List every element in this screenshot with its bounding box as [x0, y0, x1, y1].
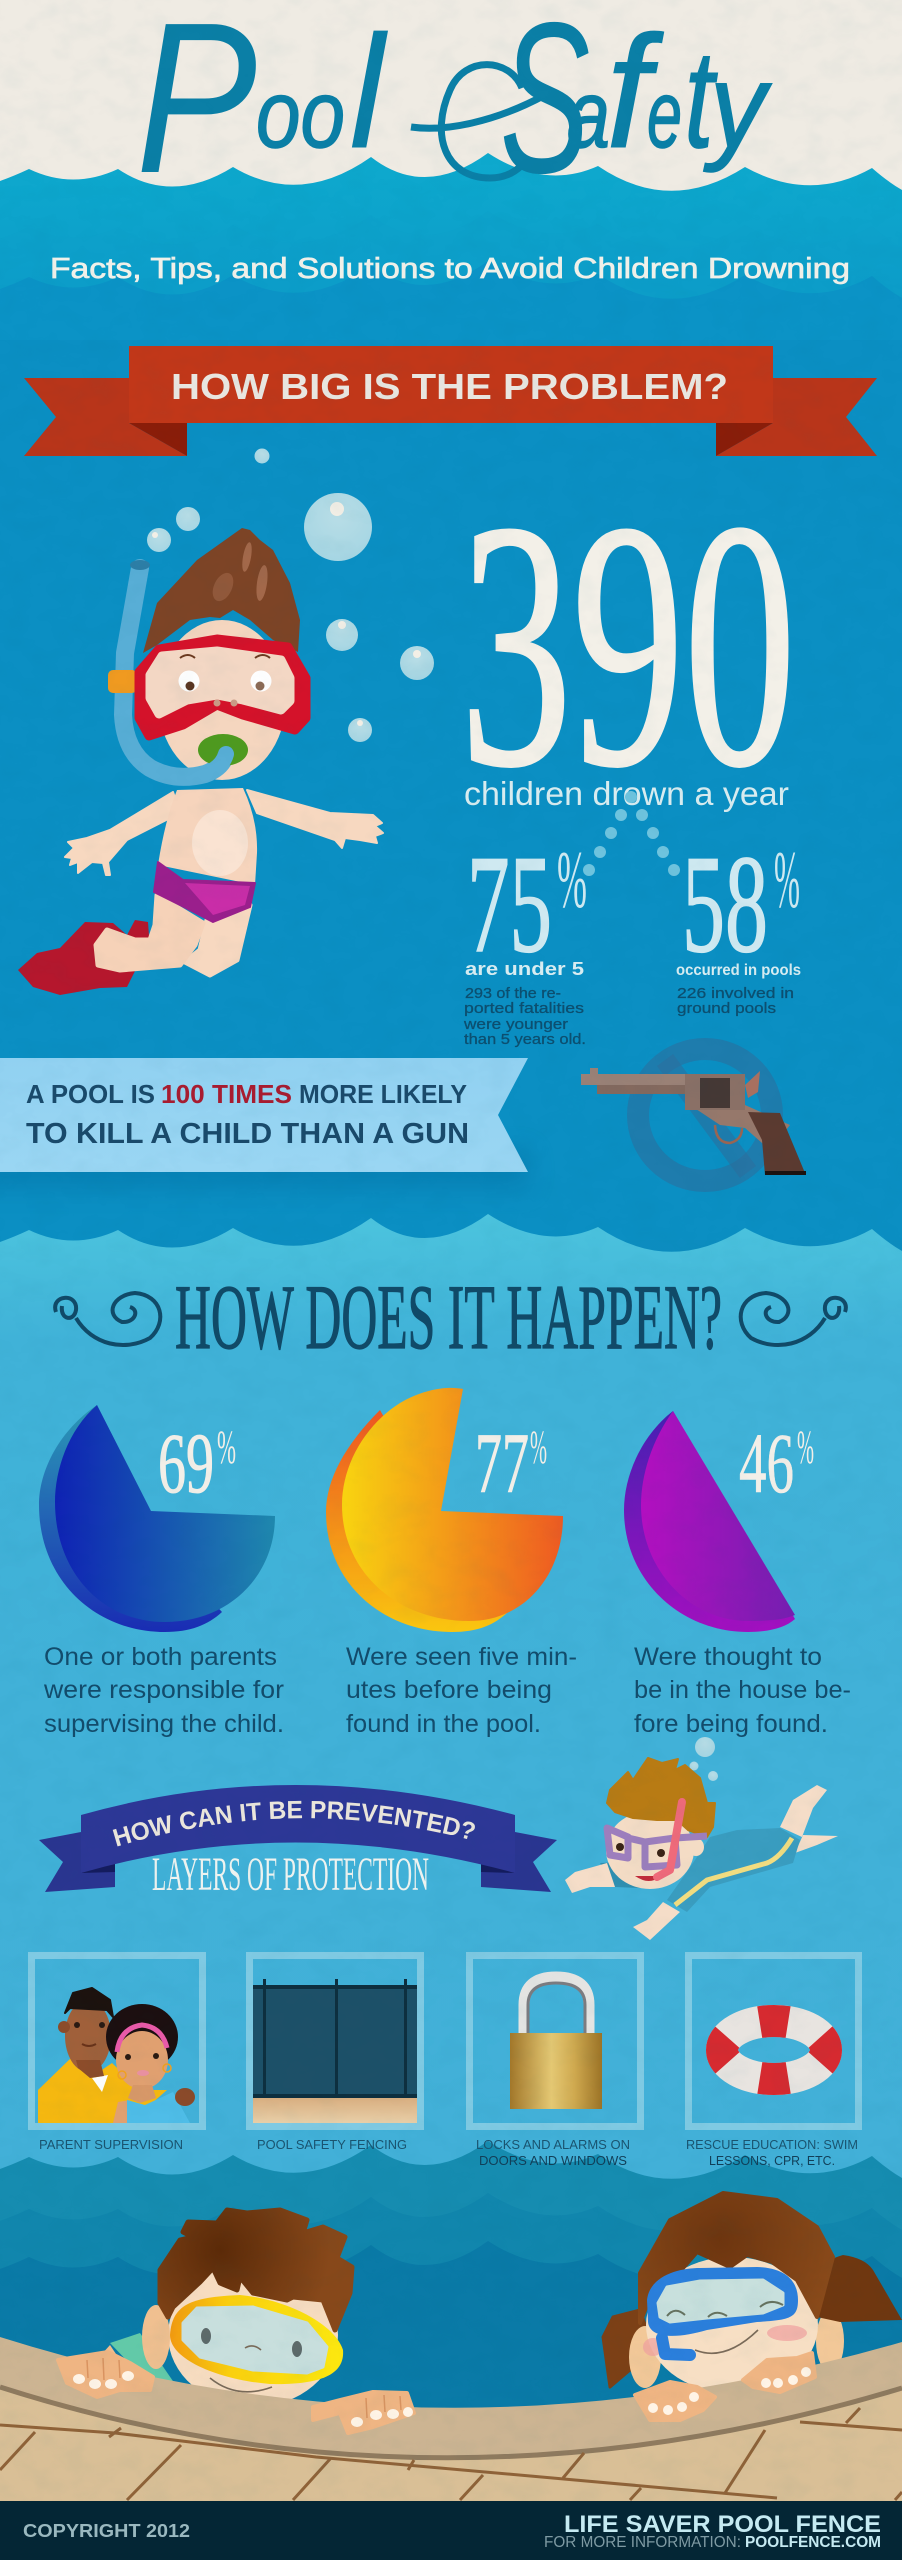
- hair: [160, 2210, 352, 2330]
- goggle lens: [658, 2280, 783, 2322]
- footer: FOR MORE INFORMATION:: [544, 2534, 741, 2551]
- smile: [695, 2330, 758, 2353]
- gun comparison banner: A POOL IS: [26, 1079, 155, 1109]
- layer: locks and alarms: [470, 1956, 640, 2168]
- small bubbles above swimmer: [690, 1737, 718, 1781]
- right pigtail: [813, 2255, 902, 2322]
- couple illustration: [38, 1988, 195, 2123]
- pie chart: 77 percent: utes before being: [346, 1676, 552, 1704]
- layer: pool safety fencing: POOL SAFETY FENCING: [257, 2137, 407, 2152]
- water section: how does it happen: [0, 1214, 902, 2261]
- red ribbon heading: HOW BIG IS THE PROBLEM?: [171, 366, 728, 407]
- face: [646, 2257, 818, 2393]
- deck tiles: [0, 2387, 902, 2501]
- woman's arm and dress: [113, 2100, 132, 2123]
- left pigtail: [603, 2310, 647, 2387]
- title: y: [703, 39, 773, 173]
- yellow stripe: [675, 1838, 792, 1905]
- pie chart: 46 percent: Were thought to: [634, 1643, 822, 1671]
- nose and smile: [210, 2346, 272, 2392]
- diving mask: [139, 639, 306, 736]
- gun comparison banner: [0, 1058, 528, 1172]
- gun comparison banner: TO KILL A CHILD THAN A GUN: [26, 1118, 469, 1150]
- stat: 75 percent: were younger: [463, 1016, 568, 1033]
- bubbles around diver: [147, 448, 434, 742]
- layer: locks and alarms: LOCKS AND ALARMS ON: [476, 2137, 630, 2152]
- front leg: [96, 895, 203, 970]
- head: [606, 1811, 694, 1889]
- boy face: [158, 620, 286, 780]
- stat: 75 percent: than 5 years old.: [464, 1031, 586, 1048]
- eyes and nose: [178, 655, 272, 706]
- back leg: [185, 905, 250, 975]
- pie chart: 69 percent: %: [217, 1421, 236, 1474]
- pie chart: 77 percent: found in the pool.: [346, 1710, 541, 1738]
- eyes: [616, 1843, 665, 1857]
- swimsuit: [667, 1828, 800, 1912]
- stat: 75 percent: [463, 827, 587, 1048]
- layer: rescue education: RESCUE EDUCATION: SWIM: [686, 2137, 858, 2152]
- green swimsuit: [110, 2333, 177, 2387]
- stat: 75 percent: 75: [467, 827, 552, 982]
- mouthpiece: [198, 734, 248, 766]
- gun comparison banner: 100 TIMES: [161, 1079, 292, 1109]
- infographic canvas: %: [774, 834, 800, 925]
- pie chart: 46 percent: [624, 1411, 851, 1738]
- title: e: [647, 61, 682, 168]
- layer: parent supervision: [32, 1956, 202, 2152]
- hair: [640, 2193, 833, 2323]
- blue prevention ribbon: HOW CAN IT BE PREVENTED?: [112, 1800, 475, 1846]
- red fins: [18, 920, 150, 995]
- boy torso: [158, 788, 257, 885]
- footer: POOLFENCE.COM: [745, 2534, 881, 2551]
- closed eyes: [667, 2302, 783, 2317]
- layer: rescue education: [686, 1956, 858, 2168]
- title: a: [567, 61, 610, 168]
- boy arms and hands: [65, 790, 383, 875]
- infographic canvas: %: [557, 834, 587, 925]
- stat: 75 percent: are under 5: [465, 959, 584, 979]
- ears: [629, 2310, 844, 2388]
- pie chart: 69 percent: supervising the child.: [44, 1710, 284, 1738]
- stat: 75 percent: 293 of the re-: [465, 985, 561, 1002]
- purple swim trunks: [154, 862, 255, 922]
- right child hand 1: [635, 2382, 715, 2420]
- pie chart: 46 percent: be in the house be-: [634, 1676, 851, 1704]
- right child hand 2: [743, 2353, 815, 2392]
- snorkel: [108, 560, 226, 777]
- title: oo: [256, 61, 345, 168]
- swimming boy illustration: [565, 1758, 838, 1940]
- footer: COPYRIGHT 2012: [23, 2521, 190, 2541]
- icon: life ring: [722, 2021, 826, 2079]
- blue prevention ribbon: LAYERS OF PROTECTION: [152, 1848, 429, 1901]
- man's hand: [175, 2088, 195, 2106]
- face: [168, 2263, 338, 2407]
- children's hands on pool edge: [58, 2352, 815, 2433]
- pie chart: 69 percent: 69: [158, 1415, 214, 1511]
- stat: 390 children: children drown a year: [464, 775, 789, 812]
- pie chart: 77 percent: 77: [475, 1415, 529, 1511]
- eyes: [201, 2328, 302, 2357]
- blue goggles: [647, 2267, 798, 2336]
- boy hair: [143, 528, 300, 653]
- pie chart: 77 percent: Were seen five min-: [346, 1643, 577, 1671]
- layer: parent supervision: PARENT SUPERVISION: [39, 2137, 183, 2152]
- pie chart: 69 percent: One or both parents: [44, 1643, 277, 1671]
- stat: 58 percent: occurred in pools: [676, 962, 801, 979]
- legs: [780, 1785, 838, 1853]
- red ribbon heading: [24, 346, 877, 456]
- right flourish: [741, 1293, 846, 1345]
- stat: 58 percent: 58: [682, 827, 768, 982]
- goggles: [607, 1828, 707, 1867]
- stat: 58 percent: 226 involved in: [677, 985, 794, 1002]
- footer: [0, 2501, 902, 2560]
- left child: [92, 2210, 352, 2407]
- revolver: [581, 1068, 806, 1175]
- title: f: [606, 2, 664, 181]
- pie chart: 69 percent: [39, 1405, 284, 1738]
- footer: LIFE SAVER POOL FENCE: [564, 2511, 881, 2538]
- arms: [565, 1863, 680, 1940]
- coping: [0, 2337, 902, 2458]
- stat: 58 percent: [676, 827, 801, 1017]
- woman's afro: [106, 2004, 178, 2070]
- pie chart: 69 percent: were responsible for: [43, 1676, 284, 1704]
- subtitle: Facts, Tips, and Solutions to Avoid Children Drowning: [50, 253, 850, 285]
- snorkel boy illustration: [18, 528, 383, 995]
- ear: [142, 2305, 170, 2369]
- left flourish: [55, 1293, 160, 1345]
- fence illustration: [253, 1979, 417, 2123]
- icon: crossed out revolver: [581, 1049, 806, 1181]
- pink snorkel: [657, 1802, 682, 1877]
- right child: [603, 2193, 902, 2393]
- man's head: [65, 2000, 111, 2072]
- yellow goggles: [170, 2295, 343, 2384]
- layer: pool safety fencing: [250, 1956, 420, 2152]
- left child hand 1: [58, 2352, 153, 2397]
- layer: locks and alarms: DOORS AND WINDOWS: [479, 2153, 627, 2168]
- title: [136, 0, 773, 218]
- water section: problem: [0, 153, 902, 1300]
- pie chart: 77 percent: [326, 1388, 577, 1738]
- pie chart: 77 percent: %: [530, 1421, 547, 1474]
- mouth: [635, 1876, 660, 1881]
- paper header background: [0, 0, 902, 240]
- title: t: [684, 20, 718, 177]
- gun comparison banner: MORE LIKELY: [299, 1079, 467, 1109]
- dot arc: [583, 791, 680, 876]
- snorkel: [662, 2338, 690, 2355]
- blue prevention ribbon: [39, 1785, 557, 1901]
- prohibition sign: [638, 1049, 772, 1181]
- layer: rescue education: LESSONS, CPR, ETC.: [709, 2153, 835, 2168]
- pie chart: 46 percent: fore being found.: [634, 1710, 828, 1738]
- blond hair: [607, 1758, 715, 1837]
- stat: 75 percent: ported fatalities: [464, 1000, 584, 1017]
- pool deck: [0, 2337, 902, 2501]
- yellow shirt: [38, 2057, 167, 2123]
- stat: 58 percent: ground pools: [677, 1000, 776, 1017]
- left child hand 2: [313, 2392, 414, 2433]
- pool water at bottom: [0, 2141, 902, 2510]
- pie chart: 46 percent: 46: [739, 1415, 794, 1511]
- woman's face: [116, 2031, 168, 2089]
- cheeks: [643, 2325, 807, 2356]
- pie chart: 46 percent: %: [797, 1421, 814, 1474]
- icon: padlock: [510, 1977, 602, 2109]
- goggle lens: [183, 2307, 327, 2373]
- title: l: [350, 2, 388, 181]
